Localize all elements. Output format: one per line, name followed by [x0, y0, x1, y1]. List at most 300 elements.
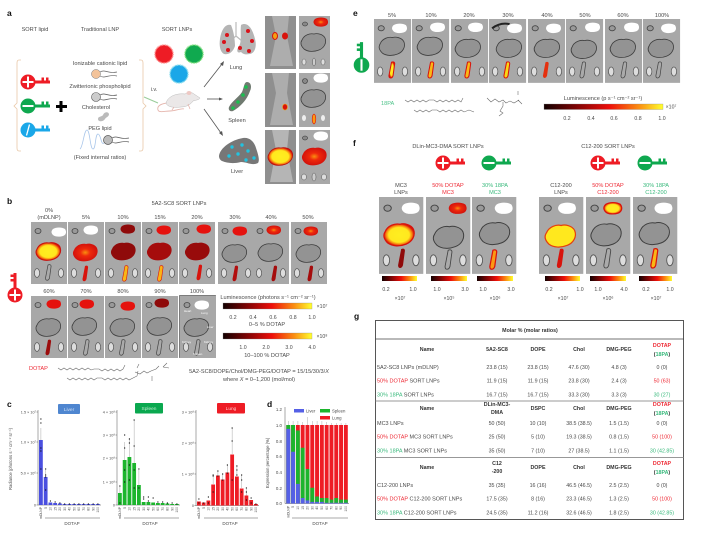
table section: C12-200: 23.3 (46.5) [566, 496, 592, 502]
icon: green zwitterionic SORT key [20, 98, 50, 114]
table section: C12-200: C12-200 LNPs [377, 483, 413, 489]
chart: liver radiance: 60 [77, 507, 81, 511]
panel g: molar ratio table [354, 311, 684, 520]
image: ex vivo organs spleen signal [299, 73, 330, 127]
colorbar legend: luminescence scales [220, 295, 328, 359]
table section: 5A2-SC8: DMG-PEG [606, 347, 632, 353]
table section: C12-200: 17.5 (35) [486, 496, 508, 502]
colorbar tick labels f: 4.0 [620, 287, 628, 293]
icon: blue SORT LNP [170, 65, 188, 83]
chart: spleen radiance: 100 [175, 507, 179, 513]
chart: lung radiance [182, 403, 259, 526]
image: e 10% [412, 19, 449, 83]
x labels: 70 [330, 506, 334, 510]
pill: lung: Lung [226, 406, 237, 412]
image: 30% 18PA C12-200 [633, 197, 677, 274]
table section: C12-200: 30% 18PA C12-200 SORT LNPs [377, 510, 457, 516]
chart: lung radiance: 30 [221, 507, 225, 511]
percent labels: 40% [541, 13, 553, 19]
icon: red cationic SORT key [20, 74, 50, 90]
label: DOTAP: DOTAP [29, 366, 48, 372]
chart: liver radiance: 100 [96, 507, 100, 513]
colorbar tick labels f: 0.2 [642, 287, 650, 293]
heading: SORT LNPs: SORT LNPs [162, 27, 192, 33]
icon: green SORT LNP [185, 45, 203, 63]
stacked bars: liver [286, 429, 348, 504]
colorbars f [382, 276, 672, 281]
chart: liver radiance: 10 [48, 507, 52, 511]
image: whole body liver signal [265, 130, 296, 184]
icon: red key C12 [590, 156, 620, 170]
condition labels: MC3 [442, 190, 454, 196]
table section: C12-200: DOPE [530, 465, 546, 471]
colorbar tick labels f: ×10⁵ [444, 296, 454, 302]
colorbar tick labels f: ×10⁷ [558, 296, 568, 302]
colorbar legend: luminescence scales: 2.0 [262, 345, 270, 351]
chart: lung radiance: 80 [244, 507, 248, 511]
table section: C12-200: 8 (16) [531, 496, 545, 502]
image: 70% [68, 296, 104, 358]
heading: C12-200: C12-200 SORT LNPs [581, 144, 635, 150]
icon: green key MC3 [482, 156, 511, 170]
chart: liver radiance: 50 [72, 507, 76, 511]
image: 50% DOTAP C12-200 [586, 197, 630, 274]
table section: 5A2-SC8: 23.8 (30) [568, 378, 590, 384]
table section: C12-200: (18PA) [654, 470, 670, 476]
table section: DLin-MC3-DMA: DOTAP [653, 402, 672, 408]
icon: red key MC3 [436, 156, 465, 170]
image: 90% [142, 296, 178, 358]
table section: 5A2-SC8: 23.8 (15) [486, 365, 508, 371]
image: whole body lung signal [265, 16, 296, 69]
chart: spleen radiance: 2 × 10⁸ [103, 456, 115, 460]
colorbar tick labels f: ×10⁷ [395, 296, 405, 302]
chart: liver radiance: DOTAP [64, 521, 80, 526]
stacked bars: spleen [286, 425, 348, 504]
image: 5% [68, 222, 104, 284]
label: zwitterionic phospholipid: Zwitterionic phospholipid [69, 84, 131, 90]
colorbar legend e: 0.8 [634, 116, 642, 122]
colorbar tick labels f: 1.0 [479, 287, 487, 293]
colorbar legend: luminescence scales: 0.2 [229, 315, 237, 321]
panel label g: g [354, 311, 359, 321]
table section: DLin-MC3-DMA: 50 (50) [489, 421, 506, 427]
row two percent labels: 80% [117, 289, 129, 295]
chart: lung radiance: 1 × 10⁸ [182, 472, 194, 476]
chart: spleen radiance: 1 × 10⁸ [103, 480, 115, 484]
table section: DLin-MC3-DMA: 30 (42.85) [650, 448, 674, 454]
image: 100% with organ labels: Kidney [204, 340, 214, 344]
chart: liver radiance: 15 [54, 507, 58, 511]
label: ionizable cationic lipid: Ionizable cationic lipid [73, 61, 127, 67]
x labels: 50 [320, 506, 324, 510]
chart: spleen radiance: 5 [123, 507, 127, 509]
table section: 5A2-SC8: 30 (27) [654, 392, 671, 398]
image: e 50% [566, 19, 603, 83]
table section: DLin-MC3-DMA: Chol [573, 406, 585, 412]
percent labels: 60% [617, 13, 629, 19]
x labels: mDLNP [286, 505, 290, 518]
chart: spleen radiance: 4 × 10⁸ [103, 410, 115, 414]
colorbar legend: luminescence scales: 0–5 % DOTAP [249, 322, 285, 328]
image: 50% DOTAP MC3 [426, 197, 470, 274]
table section: C12-200: -200 [492, 469, 502, 475]
chart: spleen radiance: 50 [152, 507, 156, 511]
table section: 5A2-SC8: 11.9 (15) [528, 378, 549, 384]
table section: C12-200: DMG-PEG [606, 465, 632, 471]
chart: liver radiance: 0 [34, 504, 36, 508]
icon: liver with blue dots [219, 138, 259, 164]
arrow to lung [204, 61, 224, 87]
chart: liver radiance: 90 [92, 507, 96, 511]
image: e 30% [489, 19, 526, 83]
row one percent labels: 40% [265, 215, 277, 221]
chart: spleen radiance: 0 [113, 504, 115, 508]
panel b: DOTAP ex vivo imaging [7, 196, 329, 383]
panel f: MC3 and C12-200 SORT LNPs [353, 138, 677, 302]
label: fixed internal ratios: (Fixed internal ratios) [74, 155, 126, 161]
colorbar legend e: ×10⁷ [666, 104, 676, 110]
chart: lung radiance: mDLNP [197, 506, 201, 519]
table section: C12-200: 16 (16) [530, 483, 547, 489]
icon: vertical green key [354, 42, 369, 73]
heading: 5A2-SC8 SORT LNPs: 5A2-SC8 SORT LNPs [152, 201, 207, 207]
percent labels [388, 13, 669, 19]
chart: lung radiance: 100 [254, 507, 258, 513]
chart: spleen radiance: 90 [170, 507, 174, 511]
table section: C12-200: 32.6 (46.5) [566, 510, 592, 516]
table section: DLin-MC3-DMA: 35 (50) [489, 448, 506, 454]
percent labels: 20% [463, 13, 475, 19]
label: 18PA: 18PA [381, 101, 395, 107]
table section: DLin-MC3-DMA: MC3 LNPs [377, 421, 404, 427]
image: MC3 LNPs [379, 197, 423, 274]
x labels: 100 [344, 506, 348, 512]
x labels: 80 [334, 506, 338, 510]
axes [276, 407, 349, 506]
table section: 5A2-SC8: 11.9 (15) [487, 378, 508, 384]
row two percent labels [43, 289, 204, 295]
chart: liver radiance [21, 404, 101, 526]
table section: DLin-MC3-DMA: 5 (10) [531, 434, 545, 440]
image: e 5% [374, 19, 411, 83]
x labels: 40 [315, 506, 319, 510]
table section: 5A2-SC8: 16.7 (15) [527, 392, 549, 398]
chart: lung radiance: 50 [230, 507, 234, 511]
chart: spleen radiance: 70 [161, 507, 165, 511]
condition labels: MC3 [395, 183, 407, 189]
table section: DLin-MC3-DMA: 25 (50) [489, 434, 506, 440]
table section: C12-200: Name [420, 465, 434, 471]
error bars [288, 417, 346, 425]
chart: spleen radiance: 30 [142, 507, 146, 511]
table section: C12-200: 50% DOTAP C12-200 SORT LNPs [377, 496, 462, 502]
row one percent labels: 30% [229, 215, 241, 221]
table section: DLin-MC3-DMA: Name [420, 406, 434, 412]
formula text: where X = 0–1,200 (mol/mol) [222, 377, 295, 383]
x labels: 30 [310, 506, 314, 510]
table section: 5A2-SC8: 4.8 (3) [611, 365, 627, 371]
plus sign [56, 101, 67, 112]
table section: 5A2-SC8: DOTAP [653, 343, 672, 349]
condition labels: C12-200 [645, 190, 667, 196]
chart: spleen radiance: 15 [132, 507, 136, 511]
table section: C12-200: 1.8 (2.5) [609, 510, 629, 516]
panel label f: f [353, 138, 356, 148]
colorbar legend: luminescence scales: 3.0 [285, 345, 293, 351]
condition labels: C12-200 [550, 183, 572, 189]
label: lung: Lung [230, 65, 242, 71]
colorbar tick labels f: 0.2 [382, 287, 390, 293]
colorbar tick labels f: 1.0 [409, 287, 417, 293]
icon: PEG lipid [80, 130, 129, 149]
image: 100% with organ labels: Heart [184, 309, 192, 313]
table section: 5A2-SC8: Chol [573, 347, 585, 353]
pill: liver: Liver [64, 407, 75, 413]
chart: lung radiance: 20 [216, 507, 220, 511]
chart: spleen radiance: 20 [137, 507, 141, 511]
panel label e: e [353, 8, 358, 18]
table section: 5A2-SC8: DOPE [530, 347, 546, 353]
row two percent labels: 90% [154, 289, 166, 295]
colorbar tick labels f: 1.0 [666, 287, 674, 293]
y axis title: Radiance (photons s⁻¹ cm⁻² sr⁻¹) [8, 427, 13, 490]
image: 0% mDLNP [31, 222, 67, 284]
table section: 5A2-SC8: 5A2-SC8 [486, 347, 508, 353]
table section: C12-200: 35 (35) [489, 483, 506, 489]
arrow to liver [204, 109, 223, 136]
table section: DLin-MC3-DMA: 19.3 (38.5) [566, 434, 592, 440]
formula text [189, 369, 329, 383]
chart: lung radiance: DOTAP [222, 521, 238, 526]
heading: Traditional LNP: Traditional LNP [81, 27, 119, 33]
condition labels: 50% DOTAP [432, 183, 464, 189]
row one percent labels: 15% [154, 215, 166, 221]
arrow to spleen [207, 98, 223, 100]
row two percent labels: 100% [190, 289, 204, 295]
row one percent labels: 0% [45, 208, 53, 214]
row one percent labels [37, 208, 314, 221]
colorbar tick labels f: 1.0 [594, 287, 602, 293]
table section: C12-200: 24.5 (35) [486, 510, 508, 516]
chart: liver radiance: 40 [68, 507, 72, 511]
table section: 5A2-SC8: 47.6 (30) [568, 365, 590, 371]
table section: DLin-MC3-DMA: DLin-MC3- [484, 402, 510, 408]
label: liver: Liver [231, 169, 243, 175]
formula text: 5A2-SC8/DOPE/Chol/DMG-PEG/DOTAP = 15/15/30/3/X [189, 369, 329, 375]
table section: C12-200: 50 (100) [652, 496, 672, 502]
colorbar legend: luminescence scales: Luminescence (photons s⁻¹ cm⁻² sr⁻¹) [220, 295, 316, 301]
colorbar legend e: 0.2 [563, 116, 571, 122]
chart: liver radiance: 1.0 × 10⁷ [21, 440, 37, 444]
table section: DLin-MC3-DMA: 50% DOTAP MC3 SORT LNPs [377, 434, 453, 440]
condition labels: 30% 18PA [643, 183, 669, 189]
colorbar tick labels f: 1.0 [576, 287, 584, 293]
row two percent labels: 60% [43, 289, 55, 295]
image: 60% [31, 296, 67, 358]
image: C12-200 LNPs [539, 197, 583, 274]
image: 100% with organ labels: Lung [201, 311, 208, 315]
image: e 60% [605, 19, 642, 83]
legend: Spleen [332, 408, 346, 414]
x labels: 20 [306, 506, 310, 510]
table section: 5A2-SC8: 50 (63) [654, 378, 671, 384]
image: ex vivo organs lung signal [299, 16, 330, 69]
left brace [14, 60, 21, 151]
table section: DLin-MC3-DMA: 30% 18PA MC3 SORT LNPs [377, 448, 447, 454]
table section: DLin-MC3-DMA: 50 (100) [652, 434, 672, 440]
condition labels: LNPs [554, 190, 568, 196]
colorbar tick labels f: 0.2 [545, 287, 553, 293]
axes: 1.0 [276, 423, 283, 428]
image: 80% [105, 296, 141, 358]
image: 100% with organ labels [180, 296, 216, 358]
x labels: 60 [325, 506, 329, 510]
icon: ionizable lipid [92, 70, 117, 78]
x labels: 5 [291, 506, 295, 508]
table section: DLin-MC3-DMA: DMG-PEG [606, 406, 632, 412]
icon: lung with red dots [220, 22, 256, 54]
colorbar legend: luminescence scales: 0.4 [249, 315, 257, 321]
heading: DLin-MC3-DMA: DLin-MC3-DMA SORT LNPs [412, 144, 484, 150]
chart: lung radiance: 5 [202, 507, 206, 509]
table section: C12-200: 0 (0) [657, 483, 668, 489]
right brace [139, 60, 146, 151]
chart: spleen radiance: 3 × 10⁸ [103, 434, 115, 438]
row one percent labels: (mDLNP) [37, 215, 61, 221]
colorbar legend: luminescence scales: 0.6 [269, 315, 277, 321]
icon: spleen with green dots [229, 82, 251, 111]
chart: lung radiance: 15 [212, 507, 216, 511]
axes: 0.8 [276, 439, 283, 444]
table section: 5A2-SC8: 16.7 (15) [486, 392, 508, 398]
axes: 1.2 [276, 407, 283, 412]
table section: C12-200: DOTAP [653, 461, 672, 467]
table section: 5A2-SC8: 3.3 (3) [611, 392, 627, 398]
chart: spleen radiance: DOTAP [142, 521, 158, 526]
table section: 5A2-SC8: 2.4 (3) [611, 378, 627, 384]
percent labels: 5% [388, 13, 396, 19]
axes: 0.6 [276, 454, 283, 459]
table section: DLin-MC3-DMA: (18PA) [654, 411, 670, 417]
condition labels: 50% DOTAP [592, 183, 624, 189]
panel a: SORT concept schematic [7, 8, 330, 184]
condition labels: C12-200 [597, 190, 619, 196]
chart: liver radiance: mDLNP [39, 506, 43, 519]
panel label c: c [7, 399, 12, 409]
icon: green key C12 [638, 156, 667, 170]
row one percent labels: 5% [82, 215, 90, 221]
colorbar legend: luminescence scales: 4.0 [308, 345, 316, 351]
image: 100% with organ labels: Liver [207, 325, 214, 329]
colorbar tick labels f: 1.0 [433, 287, 441, 293]
chart: spleen radiance: 10 [128, 507, 132, 511]
colorbar tick labels f: ×10⁶ [603, 296, 613, 302]
colorbar legend e: 0.6 [610, 116, 618, 122]
chart: spleen radiance: 80 [166, 507, 170, 511]
image: 40% [253, 222, 289, 284]
row two percent labels: 70% [80, 289, 92, 295]
chart: lung radiance: 90 [250, 507, 254, 511]
chart: lung radiance: 40 [226, 507, 230, 511]
image: e 100% [643, 19, 680, 83]
chemical structure: DOTAP [58, 363, 169, 381]
x labels: 10 [296, 506, 300, 510]
image: 10% [105, 222, 141, 284]
label: spleen: Spleen [228, 118, 246, 124]
table section: C12-200: 11.2 (16) [528, 510, 549, 516]
icon: vertical red key [8, 273, 22, 302]
table section: DLin-MC3-DMA: 1.1 (1.5) [609, 448, 629, 454]
icon: cholesterol [98, 112, 109, 121]
table section: DLin-MC3-DMA: 0 (0) [657, 421, 668, 427]
table section: 5A2-SC8: (18PA) [654, 352, 670, 358]
colorbar tick labels f: 3.0 [507, 287, 515, 293]
image: 15% [142, 222, 178, 284]
pill: spleen: Spleen [142, 406, 157, 412]
table section: 5A2-SC8: 50% DOTAP SORT LNPs [377, 378, 440, 384]
row one percent labels: 20% [191, 215, 203, 221]
chart: spleen radiance: mDLNP [118, 506, 122, 519]
image: 30% 18PA MC3 [472, 197, 516, 274]
image: whole body spleen signal [265, 73, 296, 127]
chart: lung radiance: 2 × 10⁸ [182, 442, 194, 446]
chart: lung radiance: 10 [206, 507, 210, 511]
colorbar legend e [544, 96, 676, 122]
table title: Molar % (molar ratios) [502, 328, 558, 334]
panel c: radiance bar charts [7, 399, 259, 526]
chemical structure: 18PA [405, 91, 522, 116]
table section: 5A2-SC8: 0 (0) [657, 365, 668, 371]
condition labels: LNPs [394, 190, 408, 196]
image: e 40% [528, 19, 565, 83]
percent labels: 100% [655, 13, 669, 19]
x labels: 15 [301, 506, 305, 510]
panel e: 18PA ex vivo imaging [353, 8, 680, 122]
chart: liver radiance: 70 [82, 507, 86, 511]
table section: C12-200: C12 [492, 461, 502, 467]
image: 100% with organ labels: Spleen [193, 352, 203, 356]
legend [294, 408, 346, 420]
table section: DLin-MC3-DMA [377, 402, 674, 454]
icon: phospholipid [92, 92, 117, 102]
chart: spleen radiance [103, 403, 180, 526]
x labels: 90 [339, 506, 343, 510]
colorbar legend: luminescence scales: ×10⁸ [316, 334, 328, 340]
icon: red SORT LNP [155, 45, 173, 63]
chart: spleen radiance: 40 [146, 507, 150, 511]
table frame [375, 320, 684, 520]
label: PEG lipid: PEG lipid [88, 126, 112, 132]
chart: liver radiance: 5 [44, 507, 48, 509]
row one percent labels: 10% [117, 215, 129, 221]
table section: C12-200: 2.5 (2.5) [609, 483, 629, 489]
axes: 0.0 [276, 501, 283, 506]
table section: C12-200: Chol [573, 465, 585, 471]
colorbar tick labels f: 3.0 [461, 287, 469, 293]
row one percent labels: 50% [302, 215, 314, 221]
colorbar tick labels f: ×10⁷ [651, 296, 661, 302]
condition labels [394, 183, 669, 196]
icon: blue anionic SORT key [20, 122, 50, 138]
y axis title: Expression percentage (%) [265, 437, 270, 488]
chart: liver radiance: 30 [63, 507, 67, 511]
colorbar legend: luminescence scales: 10–100 % DOTAP [244, 353, 290, 359]
table section: DLin-MC3-DMA: DSPC [531, 406, 546, 412]
axes: 0.2 [276, 486, 283, 491]
panel d: stacked expression percentage [265, 399, 349, 526]
table section: DLin-MC3-DMA: 27 (38.5) [568, 448, 590, 454]
